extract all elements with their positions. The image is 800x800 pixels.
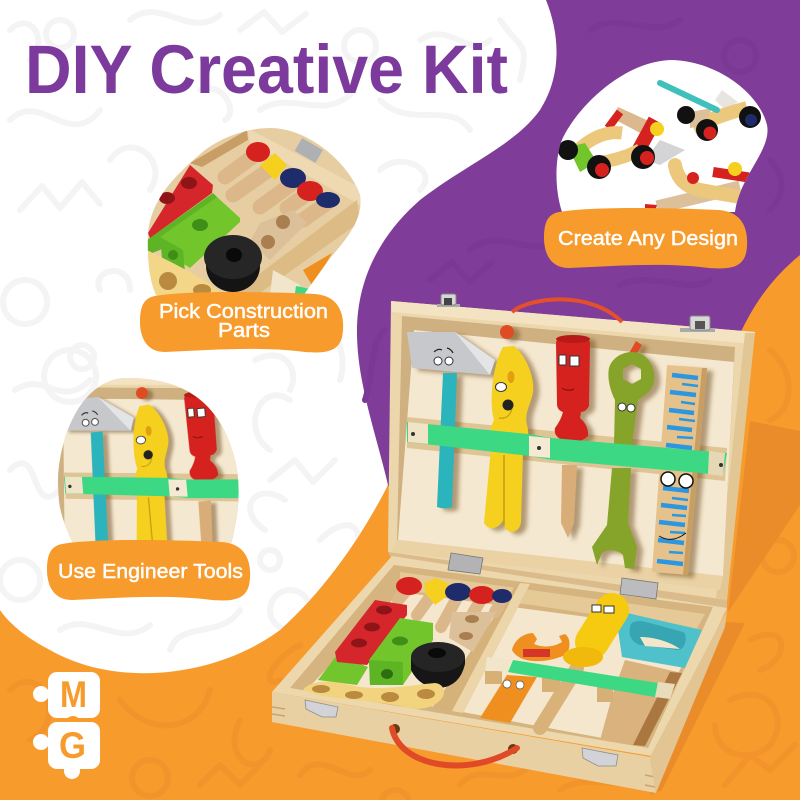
loose parts bbox=[645, 162, 752, 212]
icon: top latch right bbox=[680, 316, 715, 332]
lid frame bbox=[388, 301, 755, 600]
title: DIY Creative Kit bbox=[25, 31, 508, 108]
label: create any design: Create Any Design bbox=[558, 228, 738, 250]
yellow screwdriver bbox=[540, 605, 614, 728]
icon: hammer bbox=[407, 332, 495, 508]
divider bbox=[432, 582, 530, 713]
red cord handle of base bbox=[390, 724, 518, 765]
left car bbox=[558, 107, 685, 179]
lid recess bbox=[397, 316, 735, 575]
right car bbox=[660, 83, 761, 141]
orange wrench bbox=[480, 633, 570, 723]
hinge right bbox=[620, 578, 658, 599]
wooden rail behind strap bbox=[407, 417, 727, 481]
lid floor bbox=[398, 330, 734, 576]
icon: ruler bbox=[652, 365, 707, 575]
logo: MG puzzle pieces: M bbox=[60, 674, 87, 715]
orange doodle pattern bbox=[10, 350, 795, 800]
label: use engineer tools: Use Engineer Tools bbox=[58, 561, 243, 583]
orange background region bbox=[0, 255, 800, 800]
icon: wrench bbox=[592, 341, 654, 569]
base interior bbox=[290, 565, 713, 748]
black washer bbox=[411, 642, 465, 688]
wood gap between lid and base bbox=[388, 552, 727, 612]
front face bbox=[272, 692, 656, 793]
grey doodle pattern bbox=[0, 12, 524, 650]
cast shadow of the toolbox bbox=[650, 421, 800, 795]
thumbnail: design bbox=[556, 60, 768, 212]
label: use engineer tools bbox=[47, 540, 250, 600]
green strap of base bbox=[485, 657, 675, 699]
white background blob bbox=[0, 0, 557, 673]
bolts bbox=[396, 577, 512, 627]
label: pick construction parts bbox=[140, 292, 343, 352]
red block bbox=[335, 600, 407, 665]
toolbox lid with tools bbox=[388, 301, 755, 600]
logo: MG puzzle pieces bbox=[33, 672, 100, 779]
icon: screwdriver bbox=[555, 335, 590, 538]
lower green block bbox=[318, 655, 368, 685]
saw bbox=[600, 613, 702, 746]
thumbnail: construction parts bbox=[148, 128, 361, 296]
label: pick construction parts: Parts bbox=[218, 320, 270, 342]
hinge left bbox=[448, 553, 483, 574]
logo: MG puzzle pieces: G bbox=[59, 725, 86, 766]
label: create any design bbox=[544, 208, 747, 268]
right face bbox=[650, 610, 727, 793]
yellow plank bbox=[303, 682, 444, 709]
toolbox base bbox=[272, 553, 727, 793]
red cord handle of lid bbox=[512, 299, 622, 322]
wood nut block bbox=[449, 612, 496, 652]
base rim bbox=[272, 556, 727, 757]
purple doodle pattern bbox=[365, 20, 782, 400]
green elastic strap bbox=[407, 422, 727, 476]
label: pick construction parts: Pick Construction bbox=[159, 301, 328, 323]
front latch right bbox=[582, 748, 618, 766]
icon: top latch left bbox=[437, 294, 460, 307]
small wood spacers bbox=[485, 671, 613, 702]
green block bbox=[369, 618, 433, 685]
white blob bbox=[556, 60, 768, 212]
thumbnail: engineer tools bbox=[58, 378, 239, 544]
front latch left bbox=[305, 700, 338, 717]
icon: pliers bbox=[484, 325, 533, 532]
